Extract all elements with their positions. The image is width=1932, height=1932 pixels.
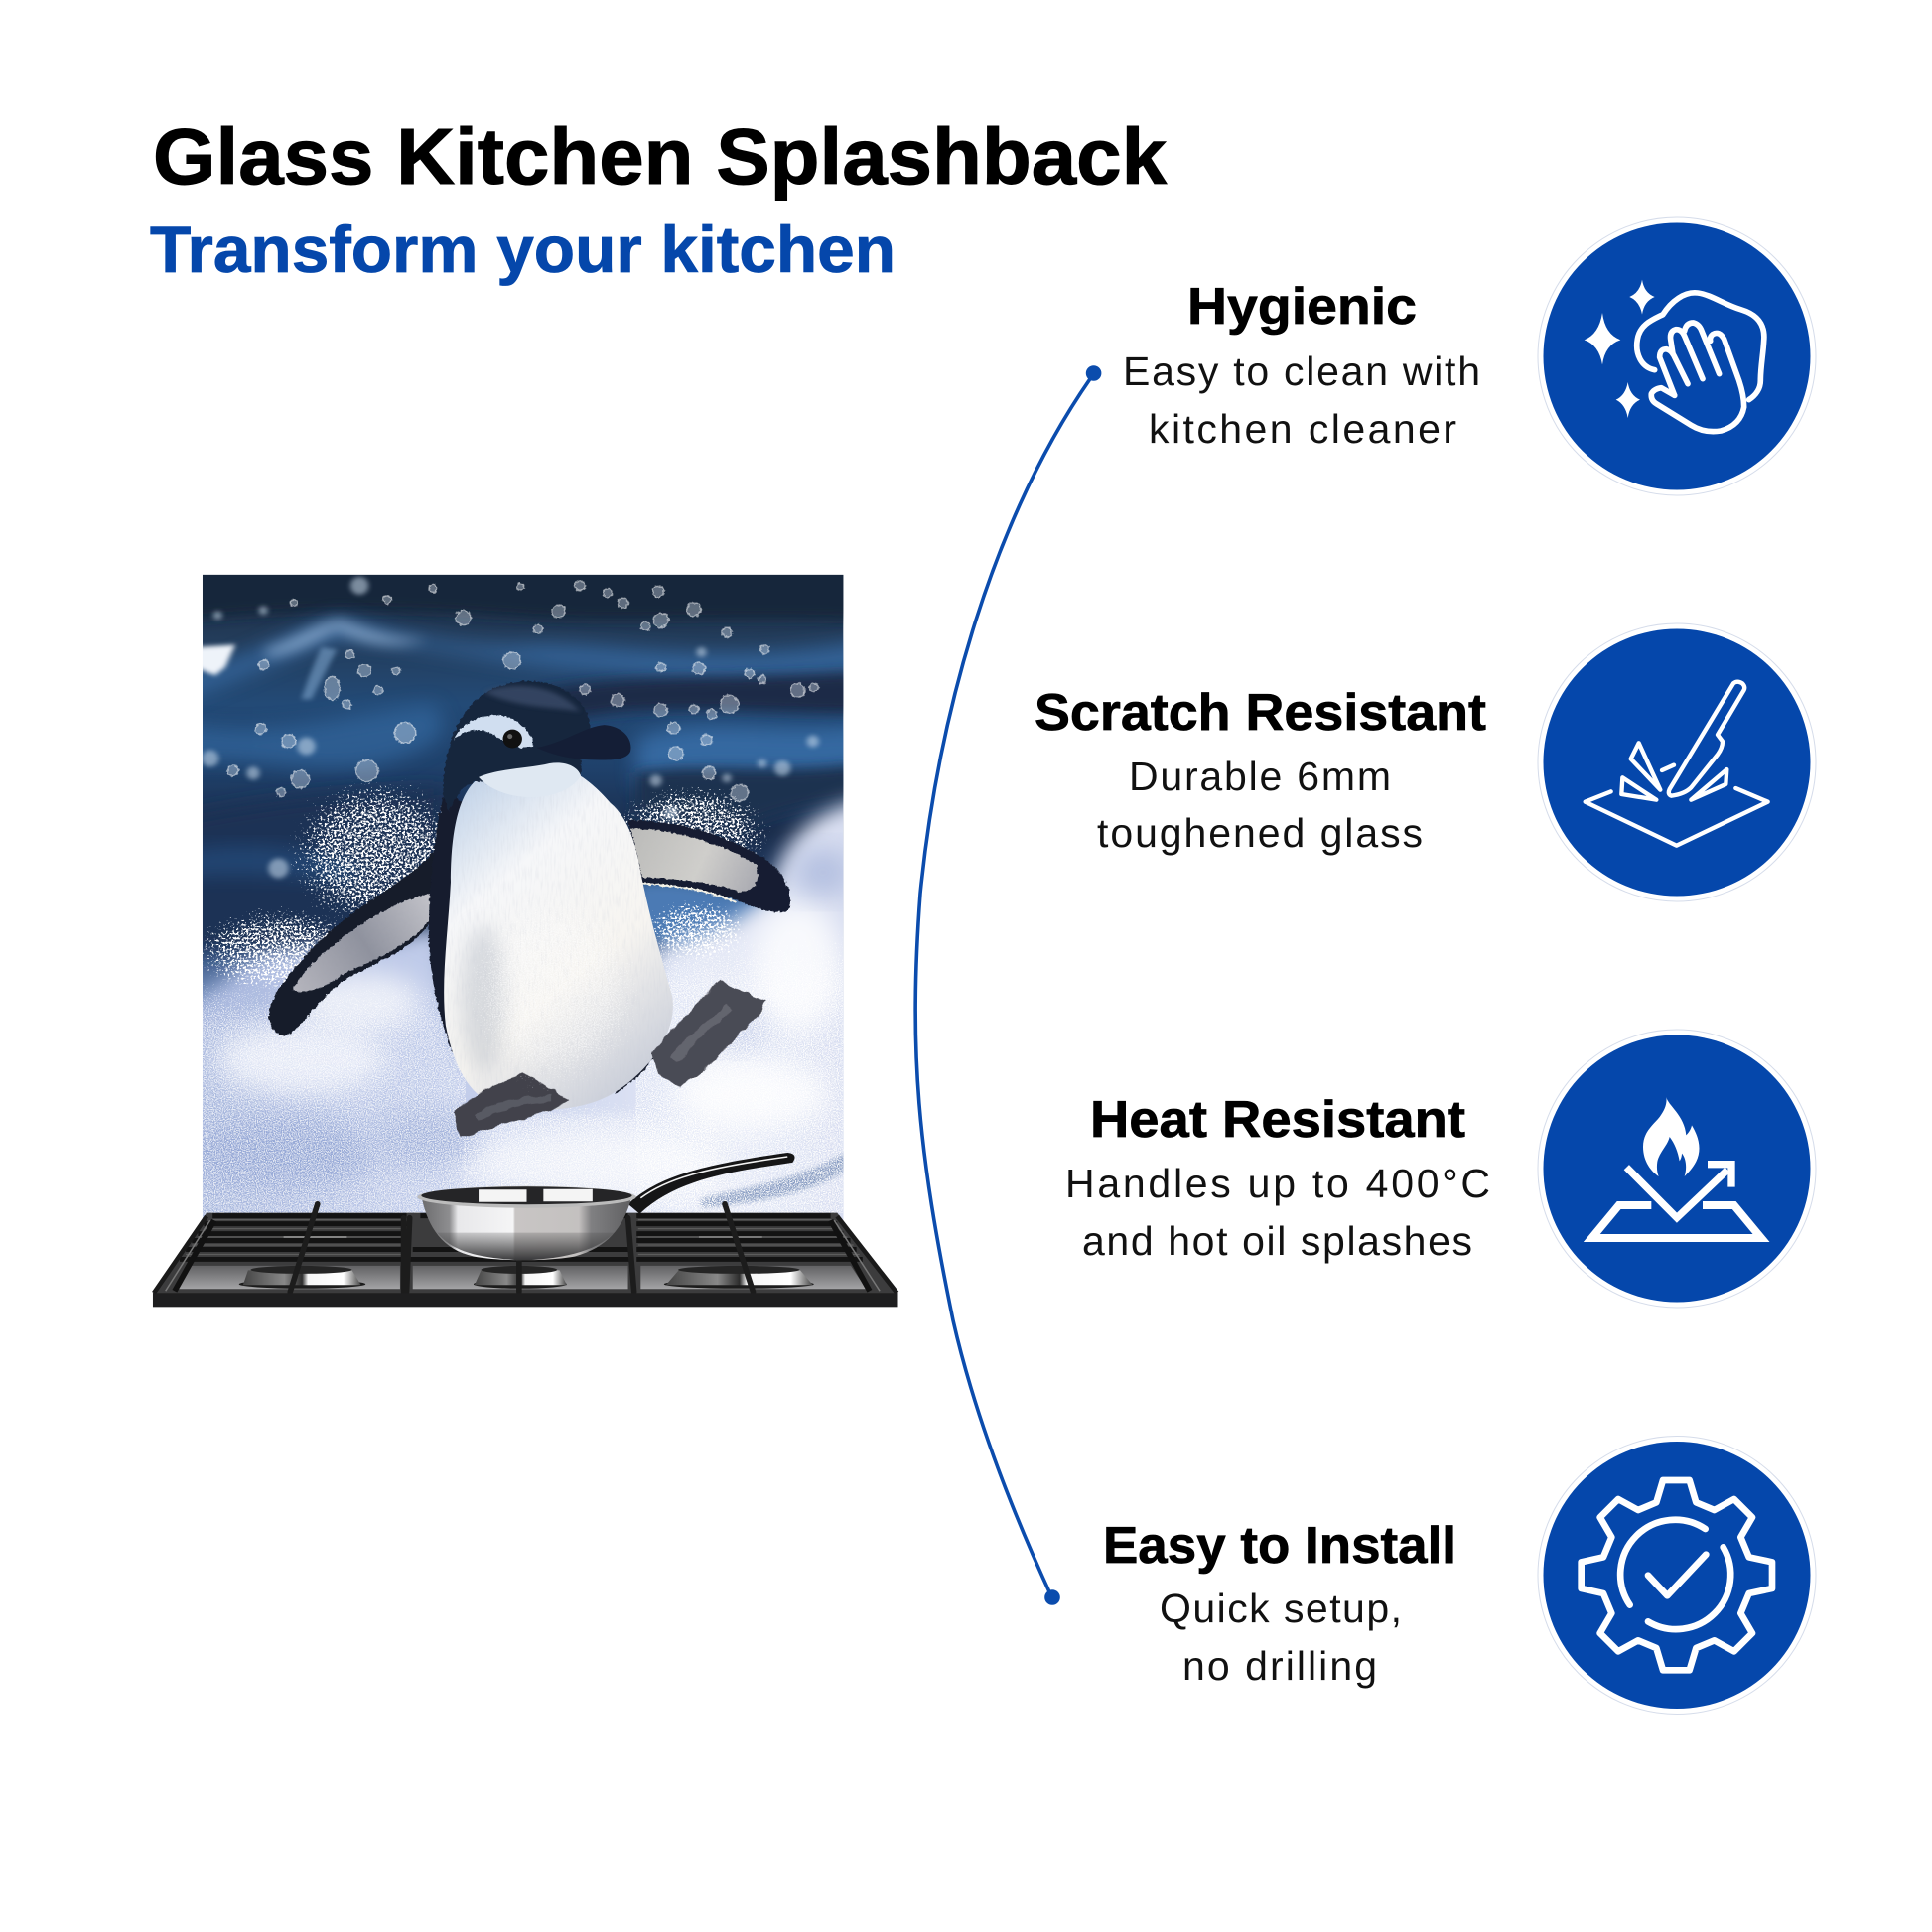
feature: Easy to Install: Easy to Install <box>1103 1517 1456 1575</box>
water droplets <box>227 581 818 801</box>
icon: gear with check mark <box>1538 1436 1816 1714</box>
feature: Easy to Install <box>1103 1517 1456 1689</box>
feature: Heat Resistant: Heat Resistant <box>1090 1091 1465 1149</box>
icon: knife scratching glass <box>1538 623 1816 901</box>
connector curve <box>915 365 1101 1605</box>
feature: Scratch Resistant: toughened glass <box>1097 810 1423 856</box>
spray over penguin <box>469 925 643 1092</box>
wing: right flipper <box>628 820 790 912</box>
subtitle: Transform your kitchen <box>150 212 896 286</box>
icon: hand wiping with sparkles <box>1538 217 1816 495</box>
feature: Hygienic: Hygienic <box>1187 278 1417 336</box>
title: Glass Kitchen Splashback <box>153 112 1168 201</box>
feature: Scratch Resistant: Durable 6mm <box>1129 754 1391 799</box>
panel: glass splashback artwork <box>180 556 869 1247</box>
feature: Heat Resistant <box>1065 1091 1490 1264</box>
cast iron grates <box>180 1216 863 1259</box>
penguin feet <box>454 980 766 1138</box>
feature: Heat Resistant: Handles up to 400°C <box>1065 1161 1490 1206</box>
feature: Heat Resistant: and hot oil splashes <box>1082 1218 1472 1264</box>
penguin <box>429 681 673 1110</box>
spray texture <box>185 773 843 1218</box>
icon: flame over heat-proof surface <box>1538 1030 1816 1308</box>
bokeh highlights <box>202 577 819 878</box>
burners <box>239 1232 814 1289</box>
wing: left flipper <box>269 848 442 1035</box>
feature: Easy to Install: no drilling <box>1182 1643 1377 1689</box>
feature: Hygienic <box>1123 278 1480 452</box>
feature: Hygienic: Easy to clean with <box>1123 348 1480 394</box>
feature: Scratch Resistant <box>1035 684 1486 856</box>
feature: Easy to Install: Quick setup, <box>1160 1586 1402 1631</box>
feature: Hygienic: kitchen cleaner <box>1149 406 1456 452</box>
burner trays <box>175 1266 866 1289</box>
feature: Scratch Resistant: Scratch Resistant <box>1035 684 1486 742</box>
gas hob <box>153 1204 897 1307</box>
beak <box>537 725 630 759</box>
illustration: splashback with penguin above a gas hob <box>153 556 897 1307</box>
frying pan <box>417 1153 795 1260</box>
